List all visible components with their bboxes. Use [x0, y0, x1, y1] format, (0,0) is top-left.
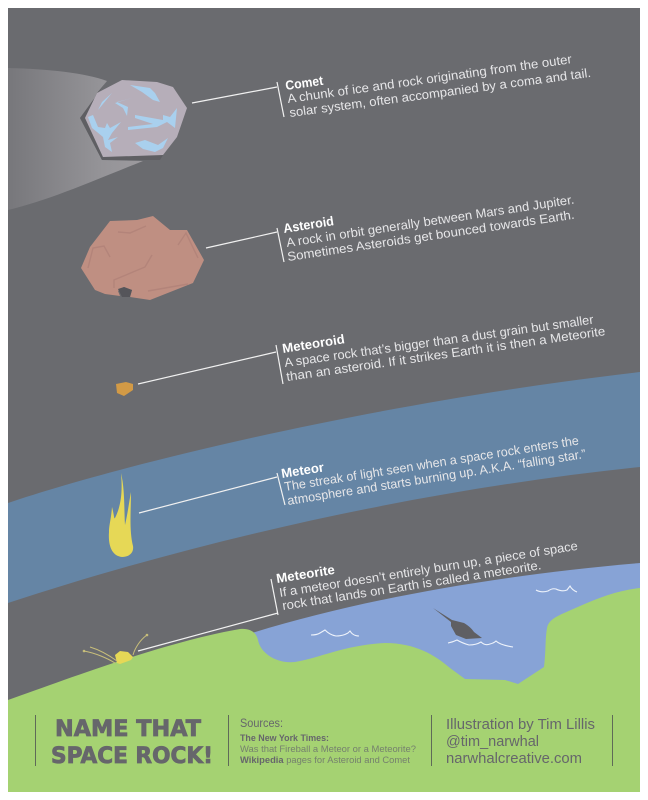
callout: meteor	[139, 434, 587, 513]
credits	[446, 717, 595, 767]
meteoroid description: A space rock that’s bigger than a dust grain but smaller	[283, 313, 594, 370]
narwhal body	[433, 608, 482, 639]
title: SPACE ROCK!	[51, 744, 213, 769]
credits: narwhalcreative.com	[446, 751, 582, 767]
sources: Wikipedia pages for Asteroid and Comet	[240, 755, 410, 766]
asteroid description: A rock in orbit generally between Mars and Jupiter.	[285, 193, 575, 250]
asteroid crater	[118, 287, 132, 297]
comet tail	[8, 68, 143, 210]
asteroid label: Asteroid	[282, 213, 335, 236]
meteoroid description: than an asteroid. If it strikes Earth it is then a Meteorite	[285, 324, 606, 384]
leader line	[138, 579, 278, 651]
credits: Illustration by Tim Lillis	[446, 717, 595, 733]
asteroid body	[81, 216, 204, 300]
impact sparks	[83, 634, 148, 663]
credits: @tim_narwhal	[446, 734, 539, 750]
comet description: A chunk of ice and rock originating from the outer	[286, 52, 573, 106]
asteroid description: Sometimes Asteroids get bounced towards Earth.	[286, 208, 575, 264]
leader line	[138, 345, 283, 384]
comet body	[85, 80, 187, 157]
comet shadow	[80, 81, 163, 160]
callout: comet	[192, 52, 592, 120]
land	[8, 588, 640, 792]
meteor flame	[109, 473, 133, 557]
waves	[311, 586, 577, 647]
title	[51, 717, 213, 769]
meteor description: atmosphere and starts burning up. A.K.A. “falling star.”	[286, 447, 587, 508]
callout: meteorite	[138, 539, 579, 651]
leader line	[139, 473, 285, 513]
comet ice	[88, 85, 177, 152]
sources	[240, 718, 416, 766]
narwhal	[311, 586, 577, 647]
comet label: Comet	[284, 73, 325, 93]
meteoroid label: Meteoroid	[281, 331, 346, 356]
meteorite description: If a meteor doesn’t entirely burn up, a piece of space	[278, 539, 579, 600]
asteroid	[81, 216, 204, 300]
meteor label: Meteor	[280, 459, 325, 481]
asteroid cracks	[88, 226, 198, 291]
leader line	[192, 82, 284, 117]
meteorite description: rock that lands on Earth is called a meteorite.	[281, 558, 542, 613]
sources: Sources:	[240, 718, 283, 730]
meteoroid	[116, 382, 133, 396]
atmosphere band	[8, 372, 640, 603]
callout: asteroid	[206, 193, 575, 264]
sea	[230, 563, 640, 690]
footer dividers	[36, 715, 612, 766]
callout: meteoroid	[138, 313, 606, 384]
comet	[8, 68, 187, 210]
footer	[36, 715, 612, 769]
meteor description: The streak of light seen when a space rock enters the	[283, 434, 580, 494]
sources: The New York Times:	[240, 733, 329, 744]
meteorite label: Meteorite	[275, 562, 336, 586]
meteorite rock	[115, 651, 133, 664]
comet description: solar system, often accompanied by a coma and tail.	[289, 66, 592, 120]
title: NAME THAT	[55, 717, 201, 742]
sources: Was that Fireball a Meteor or a Meteorite?	[240, 744, 416, 755]
meteorite	[83, 634, 148, 664]
leader line	[206, 228, 284, 262]
